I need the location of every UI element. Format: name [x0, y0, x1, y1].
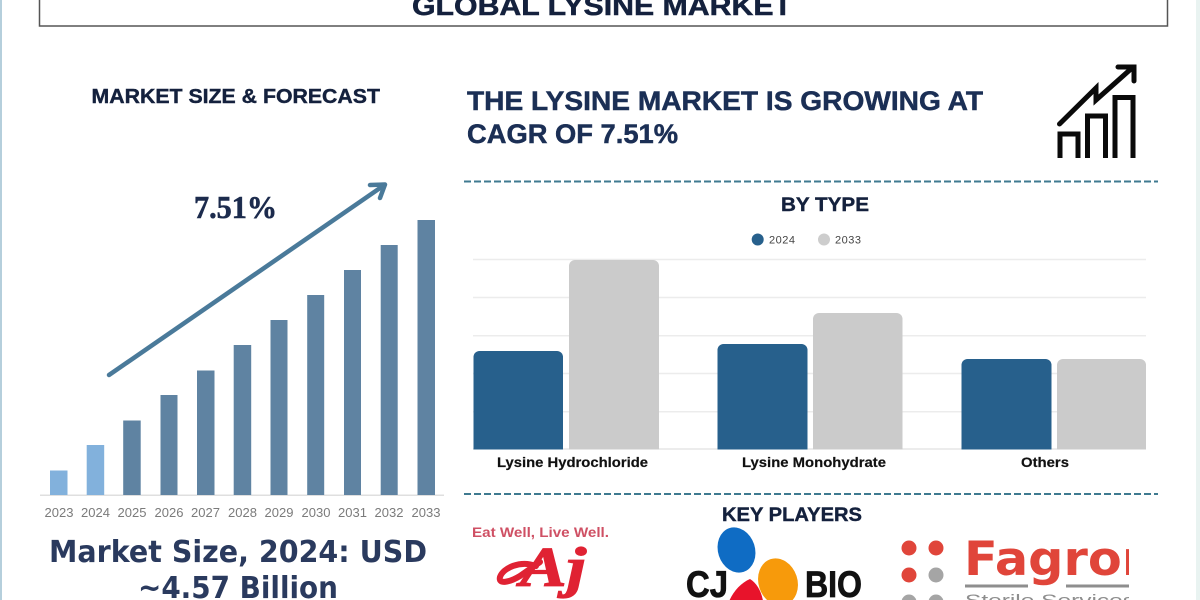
title banner [40, 0, 1168, 26]
headline: CAGR statement: THE LYSINE MARKET IS GROWING AT [467, 86, 984, 116]
bar chart: market size by year: 2028 [228, 505, 257, 520]
panel: key players [472, 505, 1157, 600]
bar chart: market size by year: 2023 [45, 505, 73, 520]
logo: Ajinomoto: Aj [516, 537, 587, 599]
legend: 2033 [835, 234, 861, 246]
category labels: Lysine Hydrochloride [497, 454, 648, 470]
market size callout [49, 535, 427, 600]
bar chart: market size by year: 2031 [338, 505, 367, 520]
logo: Fagron: Fagron [964, 532, 1157, 587]
logo: CJ Bio [686, 522, 862, 600]
bar chart: market size by year [40, 220, 444, 520]
heading: key players: KEY PLAYERS [722, 505, 862, 526]
headline: CAGR statement [467, 86, 984, 149]
legend [752, 234, 861, 246]
market size callout: Market Size, 2024: USD [49, 535, 427, 570]
growth arrow [109, 184, 385, 375]
panel: market size and forecast [40, 86, 444, 600]
bar chart: market size by year: 2030 [302, 505, 330, 520]
logo: Ajinomoto: Eat Well, Live Well. [472, 525, 609, 540]
grouped bar chart [473, 260, 1146, 450]
bar chart: market size by year: 2025 [118, 505, 146, 520]
bar chart: market size by year: 2032 [375, 505, 403, 520]
bar chart: market size by year: 2026 [155, 505, 183, 520]
category labels [497, 454, 1069, 470]
bar chart: market size by year: 2033 [412, 505, 440, 520]
CAGR value: 7.51% [194, 189, 277, 225]
bar chart: market size by year: 2027 [191, 505, 220, 520]
logo: Fagron [902, 532, 1157, 600]
heading: by type: BY TYPE [781, 195, 869, 216]
category labels: Others [1021, 454, 1069, 470]
logo: Ajinomoto [472, 525, 609, 599]
icon: rising bar chart with arrow [1060, 67, 1134, 158]
panel: by type [473, 195, 1146, 470]
heading: market size and forecast: MARKET SIZE & FORECAST [92, 86, 380, 108]
category labels: Lysine Monohydrate [742, 454, 886, 470]
bar chart: market size by year: 2024 [81, 505, 110, 520]
legend: 2024 [769, 234, 795, 246]
bar chart: market size by year: 2029 [265, 505, 293, 520]
headline: CAGR statement: CAGR OF 7.51% [467, 119, 678, 149]
